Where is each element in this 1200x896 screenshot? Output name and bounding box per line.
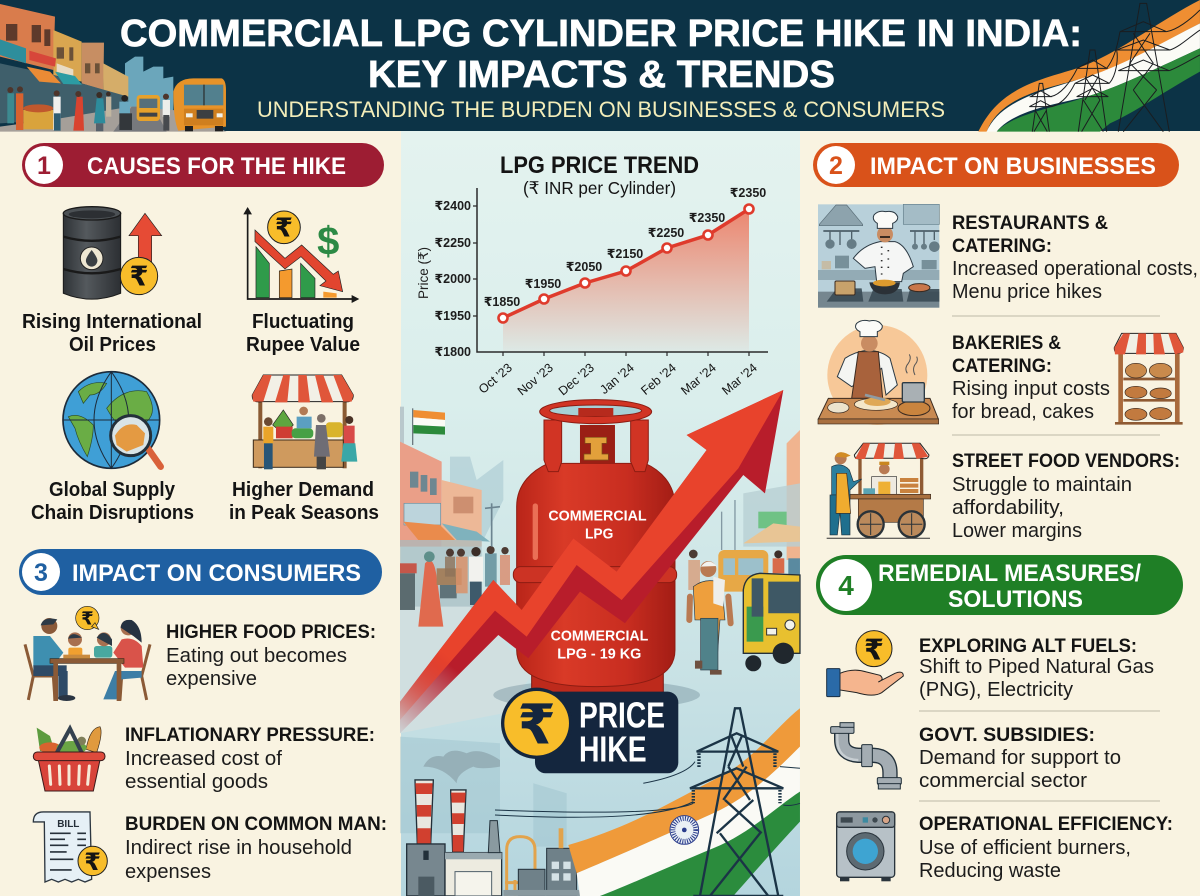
- icon: bill with rupee coin: [33, 812, 107, 882]
- caption: rupee value: Fluctuating: [252, 310, 354, 333]
- text: govt subsidies: GOVT. SUBSIDIES:: [919, 724, 1095, 746]
- text: cylinder lower label: LPG - 19 KG: [557, 647, 641, 663]
- heading: remedial measures: [816, 555, 1183, 615]
- text: burden on common man: BURDEN ON COMMON MAN:: [125, 813, 387, 835]
- icon: market stall: [252, 375, 357, 469]
- caption: peak demand: Higher Demand: [232, 478, 374, 501]
- text: restaurants: Increased operational costs,: [952, 258, 1198, 280]
- text: govt subsidies: [919, 724, 1121, 792]
- text: cylinder lower label: COMMERCIAL: [551, 629, 649, 645]
- text: bakeries: for bread, cakes: [952, 401, 1094, 423]
- heading: causes: CAUSES FOR THE HIKE: [87, 153, 346, 180]
- line chart: LPG price trend: Feb '24: [638, 361, 679, 398]
- caption: rising oil prices: [22, 310, 202, 356]
- text: bakeries: BAKERIES &: [952, 332, 1061, 354]
- heading: remedial measures: SOLUTIONS: [948, 586, 1083, 613]
- line chart: LPG price trend: ₹1850: [484, 295, 520, 309]
- text: cylinder upper label: LPG: [585, 527, 613, 543]
- text: street food vendors: STREET FOOD VENDORS:: [952, 450, 1180, 472]
- illustration: rising red arrow: [400, 390, 783, 733]
- text: operational efficiency: Use of efficient burners,: [919, 837, 1131, 859]
- text: restaurants: CATERING:: [952, 235, 1052, 257]
- illustration: tricolour wave and pylons: [978, 0, 1200, 132]
- text: operational efficiency: [919, 813, 1173, 882]
- line chart: LPG price trend: Dec '23: [556, 361, 597, 398]
- text: street food vendors: Lower margins: [952, 520, 1082, 542]
- heading: businesses: [813, 143, 1179, 187]
- icon: baker: [818, 320, 939, 425]
- title: COMMERCIAL LPG CYLINDER PRICE HIKE IN INDIA:: [120, 13, 1082, 55]
- subtitle: UNDERSTANDING THE BURDEN ON BUSINESSES & CONSUMERS: [257, 97, 945, 122]
- text: higher food prices: Eating out becomes: [166, 645, 347, 667]
- text: alt fuels: Shift to Piped Natural Gas: [919, 656, 1154, 678]
- icon: street food cart: [827, 443, 931, 538]
- text: govt subsidies: commercial sector: [919, 770, 1087, 792]
- text: cylinder lower label: [551, 629, 649, 663]
- heading: consumers: IMPACT ON CONSUMERS: [72, 560, 361, 587]
- caption: supply chain: [31, 478, 194, 524]
- line chart: LPG price trend: ₹1950: [525, 277, 561, 291]
- icon: washing machine: [837, 812, 895, 881]
- line chart: LPG price trend: ₹1800: [434, 345, 471, 359]
- line chart: LPG price trend: ₹2150: [607, 247, 643, 261]
- text: inflationary pressure: Increased cost of: [125, 748, 282, 770]
- text: higher food prices: [166, 621, 376, 690]
- icon: rupee chart falling: ₹: [275, 213, 293, 243]
- text: cylinder upper label: COMMERCIAL: [548, 509, 647, 525]
- text: bakeries: CATERING:: [952, 355, 1052, 377]
- line chart: LPG price trend: ₹2350: [730, 186, 766, 200]
- text: govt subsidies: Demand for support to: [919, 747, 1121, 769]
- caption: rupee value: Rupee Value: [246, 333, 360, 356]
- heading: LPG price trend: [500, 152, 699, 198]
- caption: supply chain: Chain Disruptions: [31, 501, 194, 524]
- caption: rupee value: [246, 310, 360, 356]
- badge: price hike: ₹: [518, 693, 556, 755]
- line chart: LPG price trend: Oct '23: [476, 361, 515, 397]
- heading: consumers: 3: [34, 559, 48, 587]
- line chart: LPG price trend: ₹2250: [648, 226, 684, 240]
- heading: LPG price trend: LPG PRICE TREND: [500, 152, 699, 179]
- icon: family eating out: ₹: [81, 609, 94, 629]
- icon: bakery shelf: [1114, 333, 1183, 423]
- line chart: LPG price trend: [416, 186, 768, 398]
- text: burden on common man: expenses: [125, 861, 211, 883]
- icon: family eating out: [25, 606, 150, 701]
- badge: price hike: HIKE: [579, 729, 647, 770]
- line chart: LPG price trend: Mar '24: [678, 361, 719, 398]
- panel: causes for the hike: [22, 143, 384, 524]
- heading: consumers: [19, 549, 382, 595]
- icon: rupee chart falling: $: [317, 219, 339, 263]
- icon: bill with rupee coin: BILL: [57, 819, 79, 830]
- heading: remedial measures: 4: [838, 570, 854, 601]
- line chart: LPG price trend: ₹2000: [434, 272, 471, 286]
- icon: oil barrel with rising arrow: [63, 207, 162, 299]
- line chart: LPG price trend: ₹2400: [434, 199, 471, 213]
- illustration: LPG cylinder: [493, 400, 700, 710]
- title: [120, 13, 1082, 96]
- text: inflationary pressure: essential goods: [125, 771, 268, 793]
- icon: hand with rupee coin: ₹: [864, 634, 884, 666]
- illustration: pylon: [495, 708, 800, 896]
- header banner: [0, 0, 1200, 132]
- icon: grocery basket: [33, 727, 105, 791]
- text: operational efficiency: OPERATIONAL EFFICIENCY:: [919, 813, 1173, 835]
- caption: rising oil prices: Oil Prices: [69, 333, 156, 356]
- text: operational efficiency: Reducing waste: [919, 860, 1061, 882]
- line chart: LPG price trend: ₹2250: [434, 236, 471, 250]
- line chart: LPG price trend: Nov '23: [515, 361, 556, 398]
- text: alt fuels: [919, 635, 1154, 701]
- text: bakeries: Rising input costs: [952, 378, 1110, 400]
- line chart: LPG price trend: ₹1950: [434, 309, 471, 323]
- text: inflationary pressure: INFLATIONARY PRESSURE:: [125, 724, 375, 746]
- title: KEY IMPACTS & TRENDS: [368, 54, 835, 96]
- text: inflationary pressure: [125, 724, 375, 793]
- icon: hand with rupee coin: [827, 631, 903, 697]
- illustration: city background: [400, 390, 800, 896]
- text: alt fuels: (PNG), Electricity: [919, 679, 1073, 701]
- text: street food vendors: Struggle to maintain: [952, 474, 1132, 496]
- icon: globe with magnifier: [63, 372, 161, 468]
- text: higher food prices: HIGHER FOOD PRICES:: [166, 621, 376, 643]
- caption: peak demand: [229, 478, 379, 524]
- icon: restaurant chef: [818, 204, 940, 308]
- caption: peak demand: in Peak Seasons: [229, 501, 379, 524]
- icon: rupee chart falling: [243, 207, 359, 303]
- line chart: LPG price trend: Mar '24: [719, 361, 760, 398]
- text: alt fuels: EXPLORING ALT FUELS:: [919, 635, 1137, 657]
- heading: causes: [22, 143, 384, 187]
- icon: bill with rupee coin: ₹: [84, 849, 101, 876]
- icon: oil barrel with rising arrow: ₹: [129, 261, 148, 292]
- text: higher food prices: expensive: [166, 668, 257, 690]
- heading: businesses: 2: [829, 152, 843, 180]
- illustration: factory: [407, 780, 583, 896]
- icon: gas pipe: [831, 723, 901, 789]
- text: burden on common man: [125, 813, 387, 883]
- panel: remedial measures: [816, 555, 1183, 882]
- heading: remedial measures: REMEDIAL MEASURES/: [878, 560, 1141, 587]
- panel: centre column: [400, 131, 800, 896]
- illustration: tricolour wave: [568, 708, 800, 896]
- badge: price hike: PRICE: [579, 694, 665, 735]
- text: bakeries: [952, 332, 1110, 423]
- heading: LPG price trend: (₹ INR per Cylinder): [523, 178, 676, 198]
- badge: price hike: [501, 688, 678, 773]
- caption: supply chain: Global Supply: [49, 478, 176, 501]
- text: cylinder upper label: [548, 509, 647, 543]
- text: street food vendors: [952, 450, 1180, 542]
- heading: causes: 1: [37, 152, 51, 180]
- line chart: LPG price trend: ₹2350: [689, 211, 725, 225]
- line chart: LPG price trend: Price (₹): [416, 247, 431, 299]
- line chart: LPG price trend: Jan '24: [597, 361, 637, 397]
- heading: businesses: IMPACT ON BUSINESSES: [870, 153, 1156, 180]
- line chart: LPG price trend: ₹2050: [566, 260, 602, 274]
- caption: rising oil prices: Rising International: [22, 310, 202, 333]
- text: restaurants: [952, 212, 1198, 303]
- illustration: street scene: [0, 4, 227, 132]
- text: burden on common man: Indirect rise in household: [125, 837, 352, 859]
- panel: impact on consumers: [19, 549, 387, 883]
- text: restaurants: RESTAURANTS &: [952, 212, 1108, 234]
- panel: impact on businesses: [813, 143, 1198, 542]
- text: street food vendors: affordability,: [952, 497, 1064, 519]
- text: restaurants: Menu price hikes: [952, 281, 1102, 303]
